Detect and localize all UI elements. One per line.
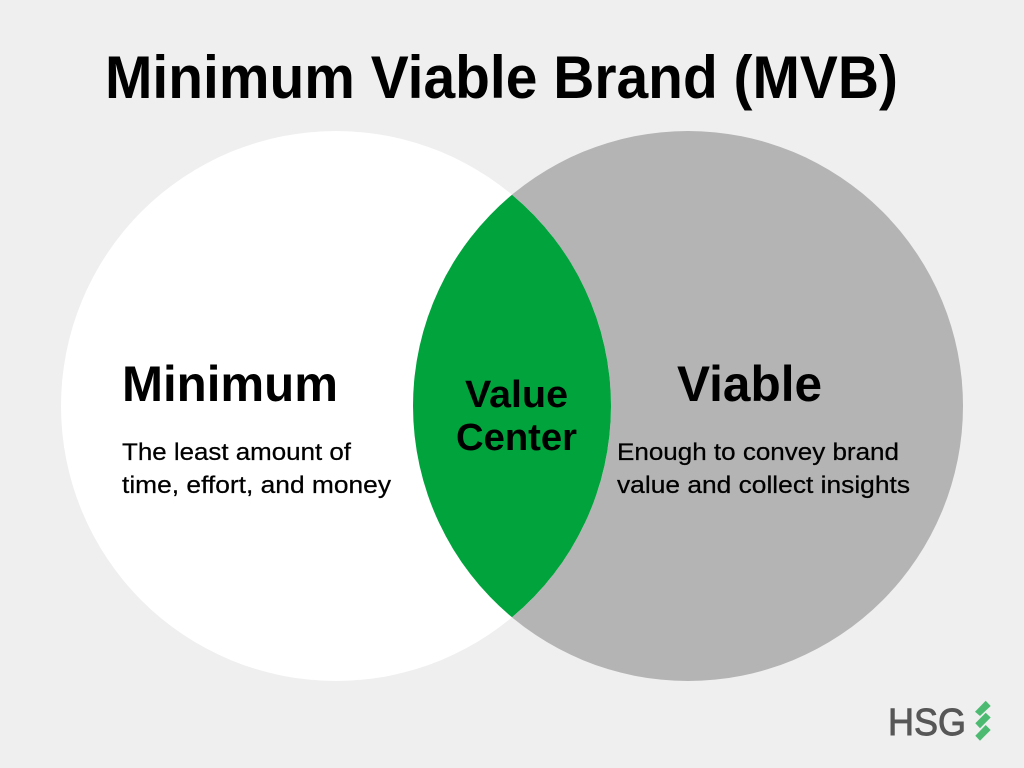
logo: HSG: [888, 701, 991, 744]
text block: value center: Value: [465, 374, 568, 416]
text block: value center: Center: [456, 417, 577, 459]
circle: minimum: [61, 131, 611, 681]
heading: minimum: Minimum: [122, 356, 338, 412]
heading: viable: Viable: [677, 356, 822, 412]
description: viable: value and collect insights: [617, 472, 910, 499]
description: minimum: time, effort, and money: [122, 472, 391, 499]
text block: viable: [617, 356, 910, 499]
text block: minimum: [122, 356, 391, 499]
description: minimum: The least amount of: [122, 439, 351, 466]
logo wordmark: HSG: [888, 702, 966, 744]
icon: green chevrons: [975, 701, 991, 741]
description: minimum: [122, 439, 391, 499]
text block: value center: [456, 374, 577, 459]
circle: viable: [413, 131, 963, 681]
title: Minimum Viable Brand (MVB): [105, 44, 898, 111]
overlap: value center: [413, 195, 611, 617]
description: viable: Enough to convey brand: [617, 439, 899, 466]
description: viable: [617, 439, 910, 499]
